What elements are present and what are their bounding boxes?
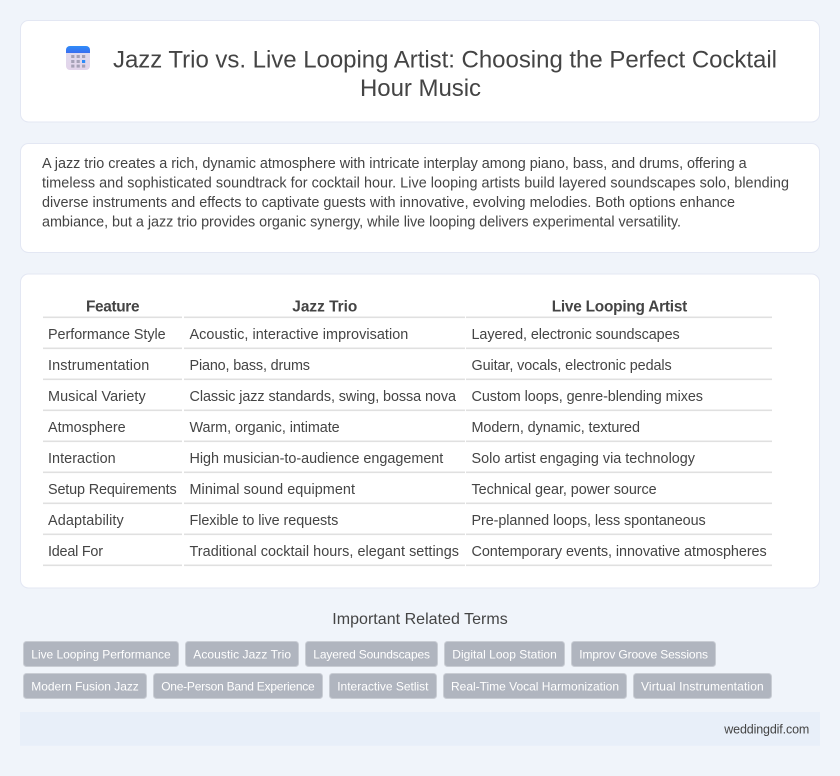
- panel: comparison table: [20, 274, 820, 588]
- footer source text: weddingdif.com: [723, 722, 809, 736]
- row: interaction: Solo artist engaging via technology: [472, 451, 696, 467]
- row: instrumentation: [48, 358, 672, 374]
- tag: real-time vocal harmonization: [444, 674, 626, 698]
- tag: layered soundscapes: Layered Soundscapes: [313, 647, 430, 661]
- row: setup requirements: Setup Requirements: [48, 482, 177, 498]
- row: musical variety: Musical Variety: [48, 389, 146, 405]
- tag: layered soundscapes: [306, 642, 438, 666]
- table header: Jazz Trio: [292, 298, 357, 316]
- row: musical variety: Custom loops, genre-blending mixes: [472, 389, 703, 405]
- title: Hour Music: [360, 75, 481, 102]
- row: setup requirements: Minimal sound equipment: [190, 482, 355, 498]
- row: instrumentation: Instrumentation: [48, 358, 149, 374]
- footer band: [20, 712, 820, 746]
- row: adaptability: Flexible to live requests: [190, 513, 338, 529]
- row: performance style: Acoustic, interactive improvisation: [190, 327, 408, 343]
- row: ideal for: Traditional cocktail hours, elegant settings: [190, 544, 459, 560]
- text block: introduction paragraph: [42, 156, 789, 230]
- tag: virtual instrumentation: [634, 674, 772, 698]
- row: performance style: Performance Style: [48, 327, 166, 343]
- tag: live looping performance: [24, 642, 178, 666]
- title: Jazz Trio vs. Live Looping Artist: Choosing the Perfect Cocktail: [113, 46, 777, 74]
- tag: interactive setlist: [330, 674, 436, 698]
- tag: interactive setlist: Interactive Setlist: [337, 679, 429, 693]
- tag: improv groove sessions: Improv Groove Sessions: [579, 647, 708, 661]
- table header: [86, 298, 687, 316]
- row: interaction: High musician-to-audience engagement: [190, 451, 443, 467]
- row: musical variety: Classic jazz standards, swing, bossa nova: [190, 389, 456, 405]
- row: setup requirements: Technical gear, power source: [472, 482, 657, 498]
- row: musical variety: [48, 389, 703, 405]
- row: ideal for: [48, 544, 767, 560]
- row: instrumentation: Guitar, vocals, electronic pedals: [472, 358, 672, 374]
- row: atmosphere: Warm, organic, intimate: [190, 420, 340, 436]
- tag: modern fusion jazz: [24, 674, 146, 698]
- row: interaction: Interaction: [48, 451, 116, 467]
- panel: title header: [20, 20, 820, 122]
- tag: one-person band experience: One-Person Band Experience: [161, 679, 315, 693]
- row: adaptability: Adaptability: [48, 513, 124, 529]
- row: setup requirements: [48, 482, 657, 498]
- table rules: [43, 316, 772, 566]
- row: performance style: Layered, electronic soundscapes: [472, 327, 680, 343]
- tag: acoustic jazz trio: Acoustic Jazz Trio: [193, 647, 291, 661]
- tag: live looping performance: Live Looping Performance: [31, 647, 171, 661]
- icon: calendar: [66, 46, 90, 70]
- tag: digital loop station: [444, 642, 564, 666]
- title: [113, 46, 777, 102]
- row: adaptability: [48, 513, 706, 529]
- row: adaptability: Pre-planned loops, less spontaneous: [472, 513, 706, 529]
- tag: virtual instrumentation: Virtual Instrumentation: [641, 679, 764, 693]
- tag: modern fusion jazz: Modern Fusion Jazz: [31, 679, 139, 693]
- tag: improv groove sessions: [572, 642, 716, 666]
- row: ideal for: Ideal For: [48, 544, 103, 560]
- text block: introduction paragraph: diverse instruments and effects to captivate guests with innovative, evolving melodies. Both options enhance: [42, 195, 735, 211]
- panel: introduction: [20, 144, 820, 252]
- table header: Live Looping Artist: [552, 298, 687, 316]
- row: instrumentation: Piano, bass, drums: [190, 358, 310, 374]
- row: ideal for: Contemporary events, innovative atmospheres: [472, 544, 767, 560]
- text block: introduction paragraph: timeless and sophisticated soundtrack for cocktail hour. Live looping artists build layered soundscapes solo, blending: [42, 176, 789, 192]
- text block: introduction paragraph: A jazz trio creates a rich, dynamic atmosphere with intricate interplay among piano, bass, and drums, offering a: [42, 156, 747, 172]
- related term tags: [24, 642, 772, 698]
- row: interaction: [48, 451, 696, 467]
- row: performance style: [48, 327, 680, 343]
- table header: Feature: [86, 298, 140, 316]
- tag: one-person band experience: [154, 674, 322, 698]
- heading: important related terms: Important Related Terms: [332, 611, 508, 628]
- row: atmosphere: Atmosphere: [48, 420, 126, 436]
- row: atmosphere: [48, 420, 640, 436]
- row: atmosphere: Modern, dynamic, textured: [472, 420, 640, 436]
- text block: introduction paragraph: ambiance, but a jazz trio provides organic synergy, while live looping delivers experimental versatility.: [42, 214, 681, 230]
- tag: real-time vocal harmonization: Real-Time Vocal Harmonization: [451, 679, 619, 693]
- tag: digital loop station: Digital Loop Station: [452, 647, 557, 661]
- tag: acoustic jazz trio: [186, 642, 298, 666]
